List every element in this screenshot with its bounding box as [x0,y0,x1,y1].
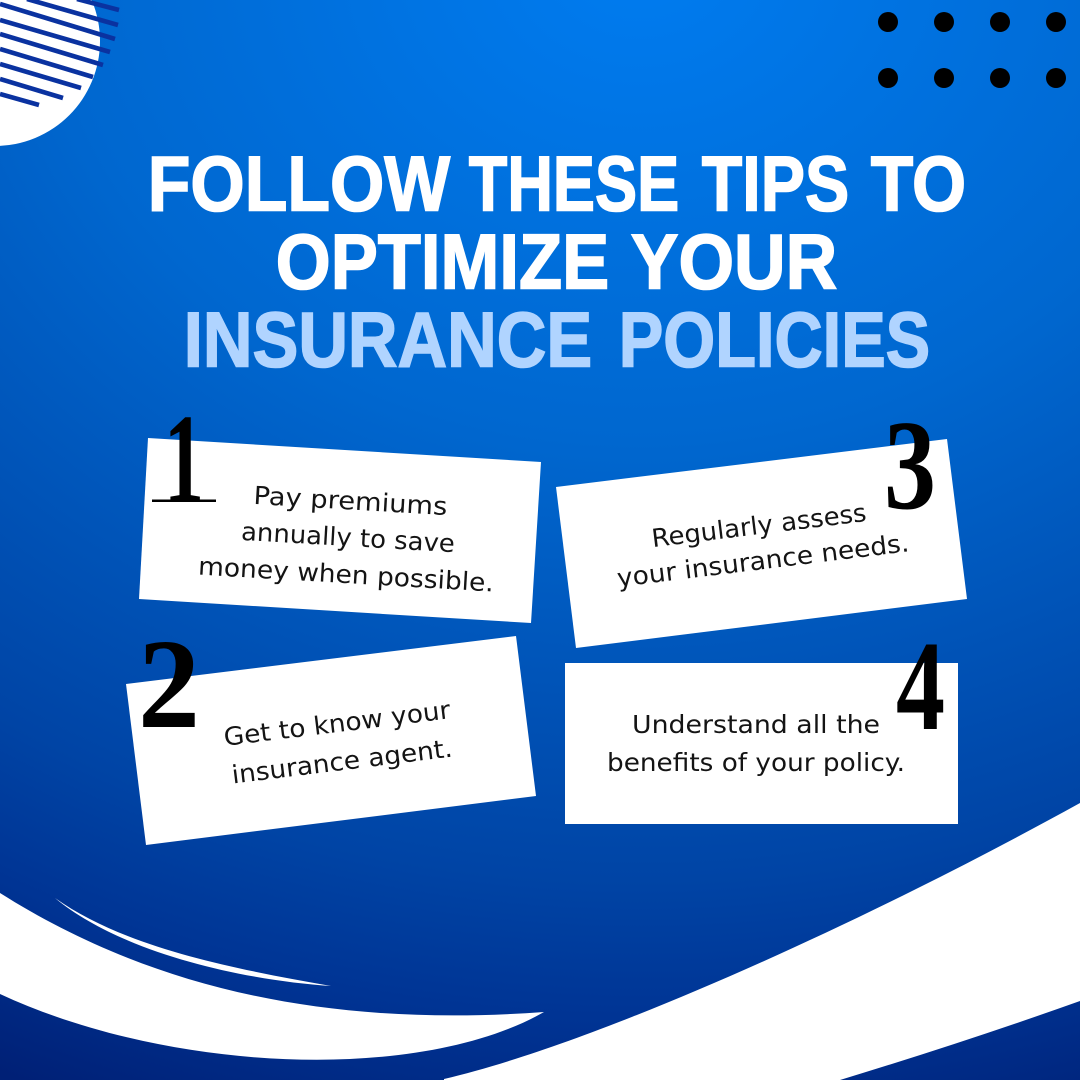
decoration: striped circle top left [0,0,119,146]
decoration: dot grid top right [878,12,1066,88]
card 4: understand benefits [565,615,958,824]
title: TO [871,140,966,228]
title: INSURANCE [184,296,592,384]
card 4: understand benefits: Understand all the [632,710,880,739]
card 1: pay premiums annually: annually to save [240,517,456,558]
title: FOLLOW [148,140,451,228]
title: THESE [469,140,679,228]
card 3: regularly assess needs: your insurance needs. [615,528,911,593]
title: TIPS [702,140,849,228]
title: POLICIES [619,296,930,384]
card 3: regularly assess needs: 3 [884,394,936,536]
decoration: bottom white swooshes [0,803,1080,1080]
card 1: pay premiums annually: Pay premiums [253,481,448,521]
card 2: get to know your agent: 2 [138,613,200,755]
card 2: get to know your agent [126,613,536,845]
title: YOUR [631,218,837,306]
card 1: pay premiums annually: 1 [164,388,204,530]
title: OPTIMIZE [276,218,609,306]
card 4: understand benefits: benefits of your policy. [607,748,905,777]
card 2: get to know your agent: insurance agent. [230,734,454,789]
title [148,140,966,384]
card 2: get to know your agent: Get to know your [222,695,453,752]
card 1: pay premiums annually [139,388,541,623]
card 3: regularly assess needs: Regularly assess [650,498,868,553]
card 4: understand benefits: 4 [896,615,945,757]
card 1: pay premiums annually: money when possible. [197,552,495,598]
card 3: regularly assess needs [556,394,967,648]
